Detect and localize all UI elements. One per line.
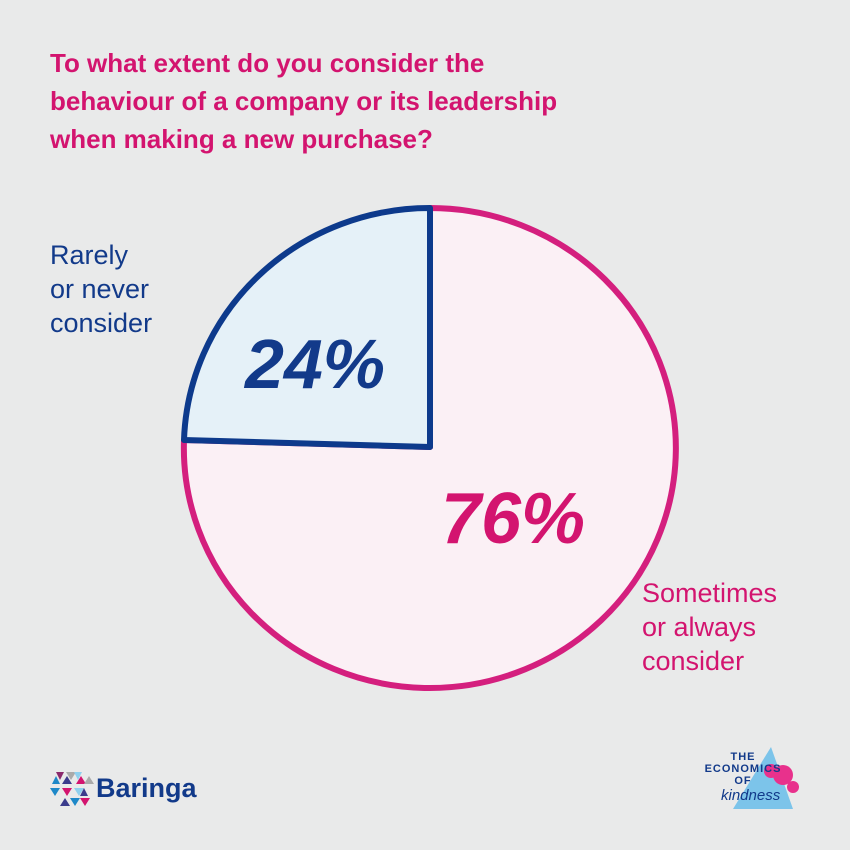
title: when making a new purchase? xyxy=(50,124,433,154)
logo: Baringa xyxy=(50,772,197,806)
label: sometimes: Sometimes xyxy=(642,578,777,608)
logo: economics of kindness xyxy=(705,747,799,809)
logo: Baringa: Baringa xyxy=(96,773,197,803)
title xyxy=(50,48,557,154)
logo: economics of kindness: kindness xyxy=(721,787,780,804)
label: sometimes xyxy=(642,578,777,676)
logo: economics of kindness: THE xyxy=(730,751,756,763)
title: To what extent do you consider the xyxy=(50,48,484,78)
slice: 24% xyxy=(184,208,430,447)
slice: 76%: 76% xyxy=(441,479,585,559)
title: behaviour of a company or its leadership xyxy=(50,86,557,116)
logo: economics of kindness: OF xyxy=(734,775,752,787)
logo: economics of kindness: ECONOMICS xyxy=(705,763,781,775)
slice: 24%: 24% xyxy=(243,325,385,403)
label: rarely xyxy=(50,240,152,338)
label: sometimes: consider xyxy=(642,646,744,676)
label: rarely: Rarely xyxy=(50,240,128,270)
label: sometimes: or always xyxy=(642,612,756,642)
label: rarely: consider xyxy=(50,308,152,338)
label: rarely: or never xyxy=(50,274,149,304)
